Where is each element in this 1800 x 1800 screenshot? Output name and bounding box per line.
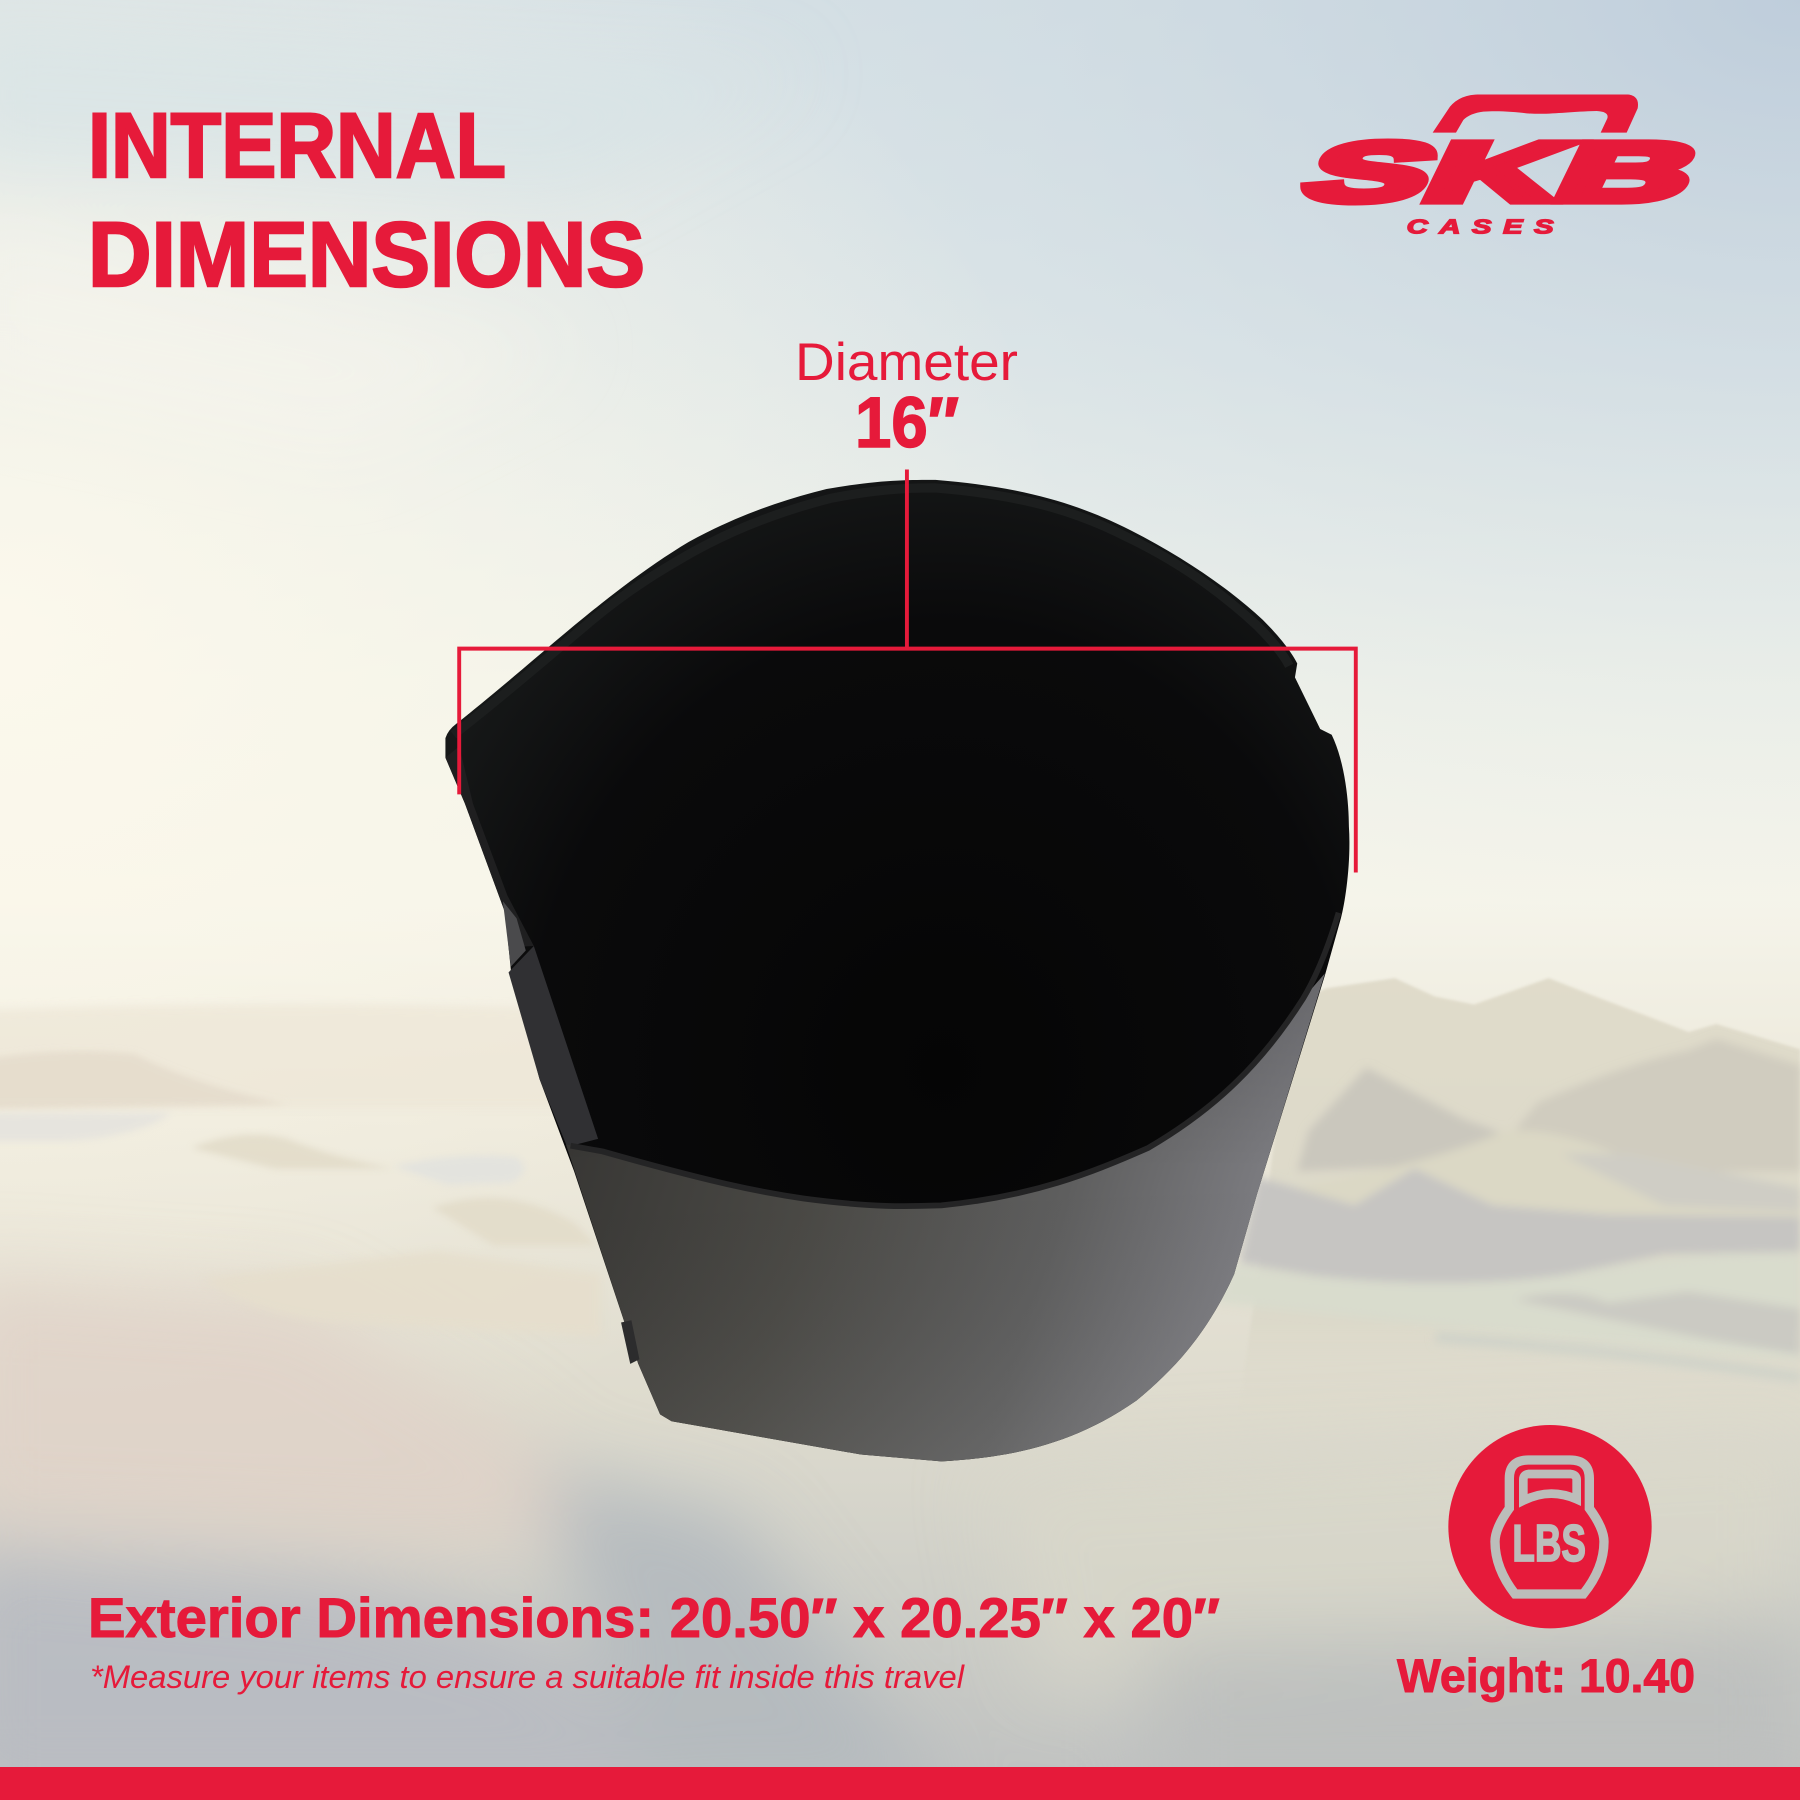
logo swoosh bbox=[1433, 94, 1638, 133]
product photo: black cylindrical case insert bbox=[445, 480, 1349, 1461]
case left rim bbox=[445, 746, 534, 947]
weight label: Weight: 10.40 bbox=[1397, 1649, 1695, 1702]
case latch bbox=[621, 1320, 639, 1364]
title: DIMENSIONS bbox=[88, 204, 645, 306]
fit note: *Measure your items to ensure a suitable fit inside this travel bbox=[90, 1659, 965, 1695]
case exterior wall bbox=[566, 974, 1325, 1461]
logo wordmark: SKB bbox=[1288, 125, 1717, 219]
case silhouette and interior bbox=[445, 480, 1349, 1461]
diameter label: 16″ bbox=[855, 384, 959, 463]
title: INTERNAL bbox=[88, 95, 506, 197]
diameter label bbox=[795, 333, 1018, 463]
case side highlight bbox=[503, 901, 526, 967]
footer bar bbox=[0, 1767, 1800, 1800]
logo: SKB Cases bbox=[1288, 94, 1717, 238]
diameter label: Diameter bbox=[795, 333, 1018, 392]
icon: weight kettlebell bbox=[1448, 1425, 1652, 1628]
diameter bracket bbox=[459, 470, 1356, 872]
case left channel bbox=[509, 946, 598, 1147]
logo subtitle: CASES bbox=[1407, 215, 1565, 238]
case rim lower edge bbox=[571, 913, 1339, 1206]
icon: weight kettlebell: LBS bbox=[1512, 1515, 1586, 1573]
title bbox=[88, 95, 645, 306]
exterior dimensions: Exterior Dimensions: 20.50″ x 20.25″ x 20″ bbox=[88, 1586, 1220, 1649]
case rim highlight bbox=[453, 488, 1289, 735]
